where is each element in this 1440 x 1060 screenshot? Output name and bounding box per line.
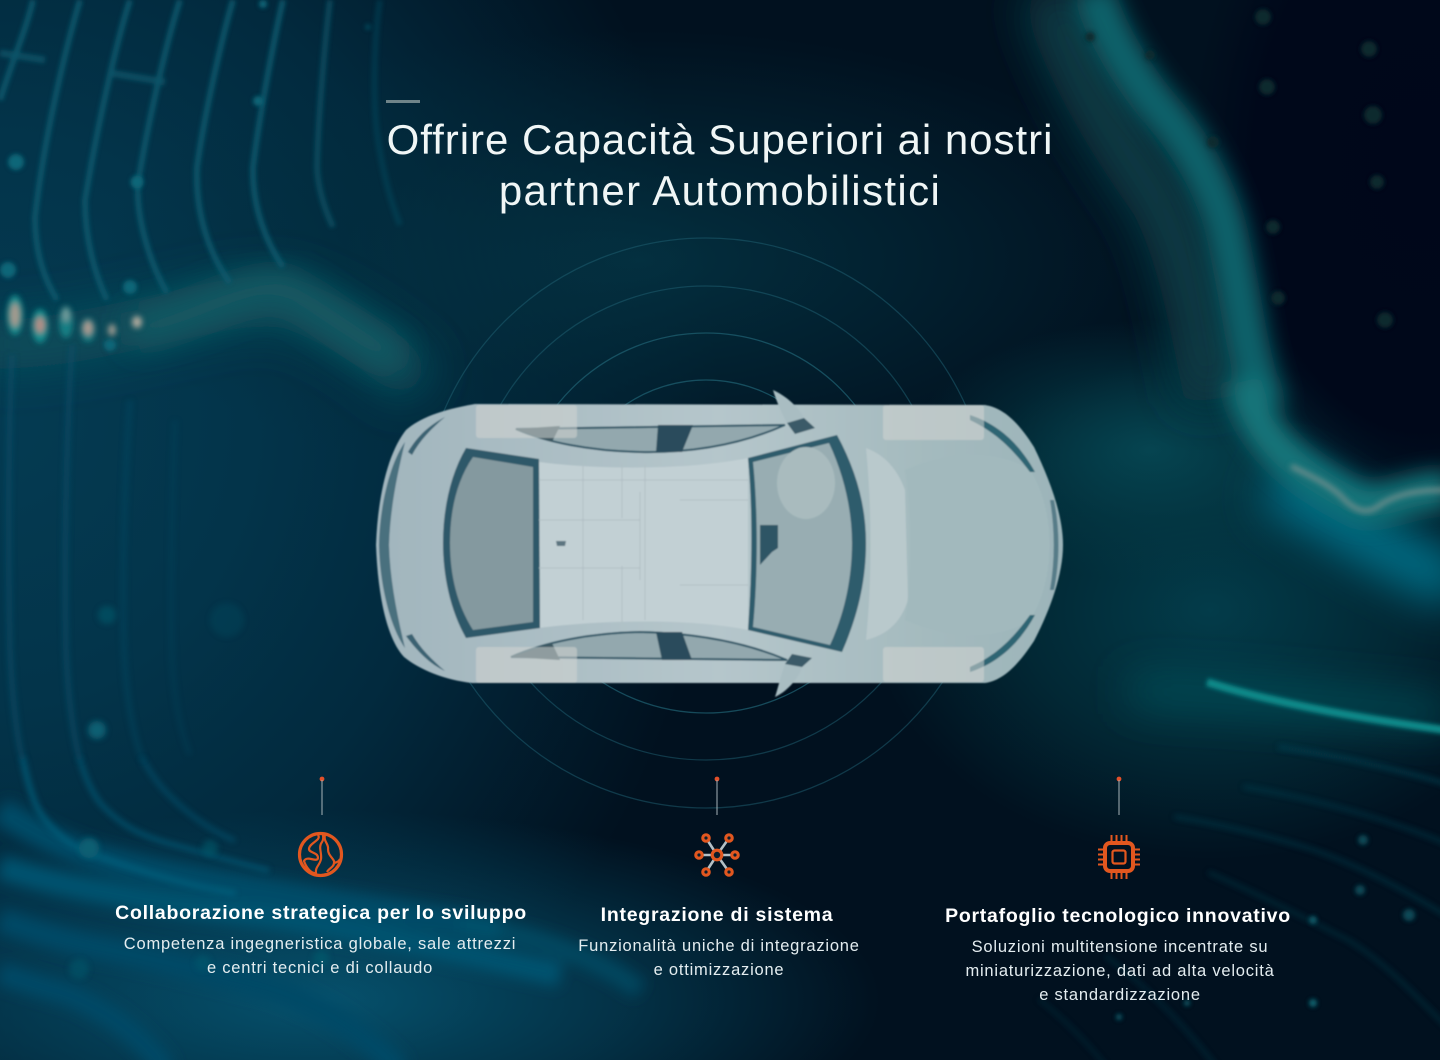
front and rear wheel arch shadows [970,415,1035,672]
description [124,935,516,977]
title: Offrire Capacità Superiori ai nostri [387,116,1053,163]
wheels [476,405,984,683]
icon: globe [298,832,344,878]
windshield [748,435,866,652]
icon: microchip [1098,835,1140,879]
description: e ottimizzazione [654,961,784,979]
icon: network nodes [694,833,740,877]
title: partner Automobilistici [499,167,941,214]
car body [376,404,1063,683]
description: miniaturizzazione, dati ad alta velocità [965,962,1275,980]
front panel and hood [866,448,908,640]
rear edge band [379,442,405,648]
pointer line [320,776,324,815]
heading: Portafoglio tecnologico innovativo [945,905,1291,927]
mirrors [773,390,804,423]
side windows [516,425,785,452]
description [965,938,1275,1004]
rear window [443,448,540,638]
column: integrazione di sistema [578,776,860,979]
heading: Collaborazione strategica per lo sviluppo [115,902,527,924]
column: portafoglio tecnologico [945,776,1291,1004]
title accent dash [386,100,420,103]
description: Competenza ingegneristica globale, sale attrezzi [124,935,516,953]
pointer line [714,776,720,815]
interior seat lines [539,464,748,622]
pointer line [1116,776,1122,815]
description: e centri tecnici e di collaudo [207,959,433,977]
description: Funzionalità uniche di integrazione [578,937,860,955]
column: collaborazione strategica [115,776,527,977]
cabin floor [539,458,748,630]
description: e standardizzazione [1039,986,1201,1004]
description: Soluzioni multitensione incentrate su [972,938,1268,956]
description [578,937,860,979]
heading: Integrazione di sistema [601,904,833,926]
title [387,116,1053,214]
